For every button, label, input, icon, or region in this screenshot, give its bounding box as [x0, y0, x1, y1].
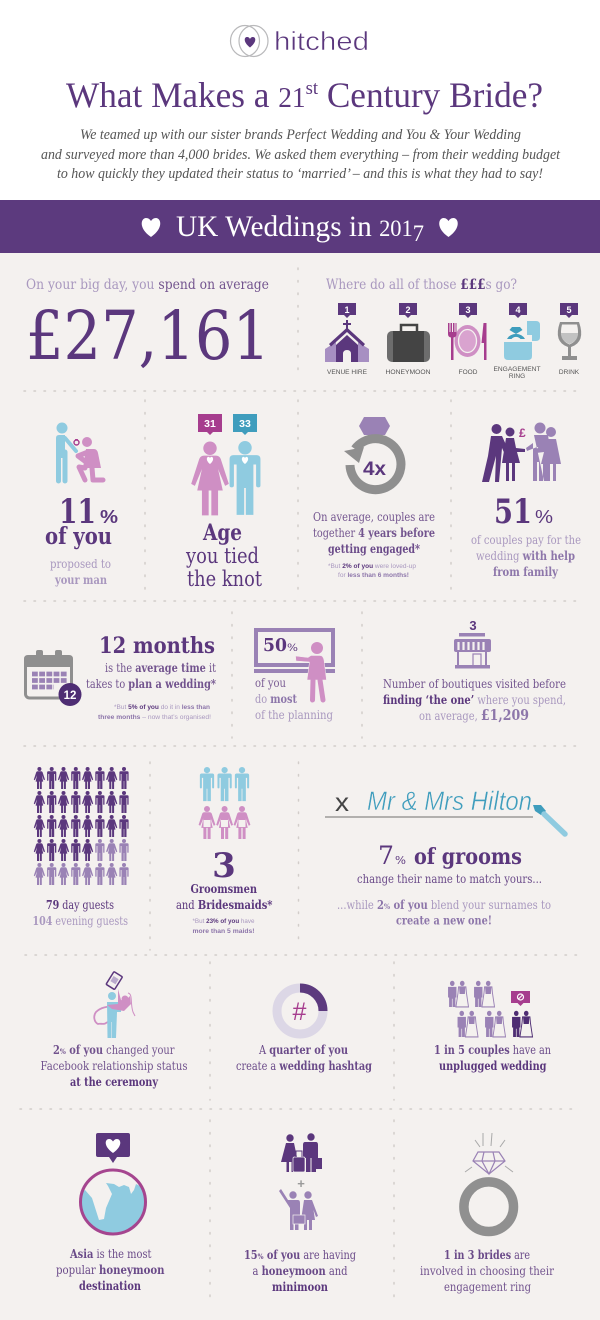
panel: boutiques visited: Number of boutiques visited before — [383, 677, 566, 691]
panel: boutiques visited: finding ‘the one’ where you spend, — [383, 693, 566, 707]
stat: 51%: 51 — [494, 492, 532, 532]
panel: wedding hashtag: A quarter of you — [258, 1043, 348, 1057]
panel: 12 months planning: is the average time it — [105, 661, 216, 675]
panel: 50% do most of the planning: 50 — [263, 635, 287, 656]
icon: dipping couple with phone — [94, 972, 135, 1038]
title: Century Bride? — [318, 75, 543, 115]
icon: food: 3 — [465, 305, 471, 315]
icon: ring with arrow — [344, 417, 401, 490]
icon: hashtag donut: # — [293, 998, 307, 1026]
banner: UK Weddings in 2017: UK Weddings in 201 — [176, 210, 414, 243]
panel: facebook status: Facebook relationship status — [40, 1059, 188, 1073]
icon: engagement ring: 4 — [515, 305, 521, 315]
panel: honeymoon and minimoon: minimoon — [272, 1280, 328, 1294]
icon: boutique: 3 — [469, 618, 477, 633]
panel: unplugged wedding: unplugged wedding — [439, 1059, 546, 1073]
body text: getting engaged* — [328, 542, 420, 556]
icon: heart bubble — [96, 1133, 130, 1163]
panel: age you tied the knot — [185, 414, 262, 591]
stat: 11%: 11 — [59, 492, 96, 532]
panel: change of name: ...while 2% of you blend your surnames to — [337, 898, 551, 912]
footnote: for less than 6 months! — [338, 572, 409, 579]
signature illustration: x — [335, 787, 349, 817]
icon: honeymoon: 2 — [405, 305, 411, 315]
panel: groomsmen and bridesmaids: more than 5 maids! — [192, 928, 254, 935]
icon: ring with arrow: 4x — [363, 459, 386, 480]
panel: wedding hashtag — [236, 988, 372, 1073]
icon: venue hire — [325, 303, 369, 362]
panel: change of name — [325, 786, 565, 928]
panel: help from family: from family — [493, 565, 559, 579]
icon: calendar — [24, 650, 82, 706]
panel: 50% do most of the planning: % — [287, 643, 298, 654]
panel: change of name: create a new one! — [396, 914, 492, 928]
panel: age you tied the knot: the knot — [187, 567, 262, 591]
icon: bridesmaids — [199, 806, 250, 839]
panel: unplugged wedding: 1 in 5 couples have an — [434, 1043, 551, 1057]
footnote: *But 2% of you were loved-up — [328, 563, 416, 570]
panel: age you tied the knot: you tied — [185, 544, 259, 568]
panel: honeymoon and minimoon: 15% of you are having — [244, 1248, 356, 1262]
panel: help from family — [471, 422, 581, 579]
footnote — [328, 563, 416, 579]
panel: groomsmen and bridesmaids: Groomsmen — [190, 882, 257, 896]
icon: travellers: + — [297, 1176, 305, 1191]
icon: groomsmen — [200, 767, 249, 801]
panel: together 4 years — [313, 417, 435, 579]
panel: where the money goes — [325, 277, 581, 380]
panel: boutiques visited — [383, 618, 566, 724]
icon: family group: £ — [519, 426, 526, 440]
bubble: 33: 33 — [239, 418, 251, 430]
banner: UK Weddings in 2017 — [0, 200, 600, 253]
panel: 50% do most of the planning — [254, 630, 335, 722]
panel: age you tied the knot: Age — [202, 520, 242, 546]
panel: help from family: % — [535, 507, 553, 527]
panel: 12 months planning — [24, 633, 216, 721]
panel: proposed to your man: % — [100, 507, 118, 527]
intro text: and surveyed more than 4,000 brides. We asked them everything – from their wedding budget — [41, 147, 561, 163]
icon: drink: 5 — [566, 305, 572, 315]
signature illustration: Mr & Mrs Hilton — [367, 786, 532, 816]
icon: food — [448, 303, 486, 360]
icon: calendar: 12 — [64, 690, 76, 702]
panel: 12 months planning: takes to plan a wedding* — [86, 677, 216, 691]
panel: facebook status: 2% of you changed your — [53, 1043, 175, 1057]
panel: wedding hashtag: create a wedding hashtag — [236, 1059, 372, 1073]
panel: 12 months planning: three months – now that’s organised! — [98, 714, 211, 721]
panel: proposed to your man: of you — [45, 523, 112, 550]
panel: 12 months planning: 12 months — [99, 633, 215, 659]
big number: £27,161 — [26, 297, 270, 375]
icon: groom figure — [230, 441, 260, 515]
panel: groomsmen and bridesmaids — [176, 767, 272, 935]
panel: groomsmen and bridesmaids: *But 23% of you have — [192, 918, 255, 925]
panel: honeymoon destination: Asia is the most — [69, 1247, 152, 1261]
panel: unplugged wedding — [434, 981, 551, 1073]
panel: change of name: 7 — [378, 841, 394, 870]
panel: proposed to your man: your man — [54, 573, 107, 587]
panel: honeymoon destination: popular honeymoon — [56, 1263, 165, 1277]
icon: travellers — [279, 1133, 322, 1230]
intro text — [41, 127, 561, 182]
icon: board and teacher — [254, 630, 335, 700]
icon labels: ENGAGEMENT — [494, 366, 541, 373]
panel: honeymoon and minimoon: a honeymoon and — [252, 1264, 348, 1278]
title: st — [306, 78, 319, 99]
body text — [313, 510, 435, 556]
panel: proposed to your man — [45, 422, 118, 587]
panel: honeymoon destination: destination — [79, 1279, 141, 1293]
panel: facebook status — [40, 972, 188, 1089]
logo: hitched: hitched — [274, 26, 369, 56]
panel: 50% do most of the planning: of the planning — [255, 708, 333, 722]
intro text: We teamed up with our sister brands Perfect Wedding and You & Your Wedding — [80, 127, 521, 143]
panel: guest numbers: 79 day guests — [46, 898, 114, 912]
panel: honeymoon destination — [56, 1133, 165, 1293]
body text: together 4 years before — [313, 526, 435, 540]
signature illustration — [325, 786, 565, 834]
icon: bride figure — [191, 442, 229, 515]
panel: engagement ring: engagement ring — [444, 1280, 531, 1294]
title: What Makes a 21 — [66, 75, 306, 115]
icon labels: RING — [509, 373, 525, 380]
panel: 50% do most of the planning: do most — [255, 692, 297, 706]
body text: On average, couples are — [313, 510, 435, 524]
panel: average spend — [26, 277, 270, 375]
logo: hitched — [230, 26, 369, 56]
icon: proposal — [56, 422, 103, 481]
panel: engagement ring — [420, 1133, 554, 1294]
banner: UK Weddings in 2017: 7 — [413, 221, 424, 246]
panel: engagement ring: involved in choosing their — [420, 1264, 554, 1278]
panel: engagement ring: 1 in 3 brides are — [444, 1248, 530, 1262]
icon: drink — [558, 303, 581, 360]
panel: where the money goes: Where do all of those £££s go? — [326, 277, 517, 293]
icon: couples — [448, 981, 533, 1037]
panel: proposed to your man: proposed to — [50, 557, 111, 571]
panel: groomsmen and bridesmaids: and Bridesmaids* — [176, 898, 272, 912]
panel: help from family: of couples pay for the — [471, 533, 581, 547]
panel: change of name: of grooms — [414, 844, 522, 870]
bubble: 33 — [233, 414, 257, 435]
icon: family group — [482, 422, 561, 482]
panel: guest numbers — [32, 767, 129, 928]
panel: groomsmen and bridesmaids: 3 — [212, 846, 236, 886]
icon labels — [327, 366, 580, 380]
panel: 50% do most of the planning: of you — [255, 676, 286, 690]
icon: diamond ring — [464, 1133, 514, 1231]
panel: facebook status: at the ceremony — [70, 1075, 159, 1089]
icon labels: VENUE HIRE — [327, 369, 368, 376]
panel: average spend: On your big day, you spend on average — [26, 277, 269, 293]
icon labels: HONEYMOON — [386, 369, 431, 376]
bubble: 31 — [198, 414, 222, 435]
panel: honeymoon and minimoon — [244, 1133, 356, 1294]
icon: boutique — [454, 618, 491, 668]
icon: honeymoon — [387, 303, 430, 362]
panel: change of name: % — [395, 854, 406, 867]
icon grid: guests — [34, 767, 129, 885]
panel: boutiques visited: on average, £1,209 — [419, 706, 529, 724]
icon: globe — [79, 1168, 147, 1236]
icon labels: FOOD — [459, 369, 478, 376]
panel: change of name: change their name to match yours... — [357, 872, 542, 886]
panel: 12 months planning: *But 5% of you do it in less than — [114, 704, 210, 711]
intro text: to how quickly they updated their status to ‘married’ – and this is what they had to say! — [57, 166, 543, 182]
icon: engagement ring — [504, 303, 540, 360]
icon labels: DRINK — [559, 369, 580, 376]
panel: guest numbers: 104 evening guests — [32, 914, 128, 928]
panel: help from family: wedding with help — [476, 549, 575, 563]
icon: venue hire: 1 — [344, 305, 350, 315]
bubble: 31: 31 — [204, 418, 216, 430]
